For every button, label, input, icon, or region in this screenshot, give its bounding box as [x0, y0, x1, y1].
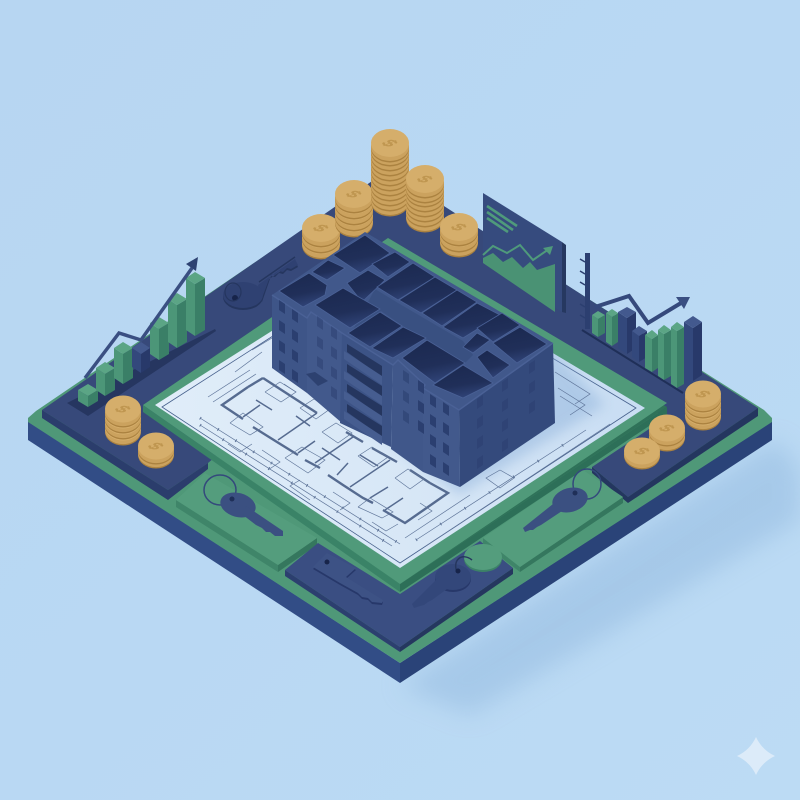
frame top surface: [42, 170, 758, 497]
chart base plate: [67, 329, 216, 416]
right wall: [459, 343, 555, 487]
left bar chart: [67, 257, 216, 416]
coin stack: right tile large: [685, 380, 721, 430]
coin stack: tall: [371, 129, 409, 216]
coin stack: left: [335, 180, 373, 238]
balconies: [344, 344, 382, 445]
blueprint sheet: [155, 330, 645, 568]
panel face: [483, 193, 562, 312]
key shadow: [258, 261, 298, 302]
coin stack: right tile small: $: [628, 445, 656, 457]
interior corridor: [352, 289, 473, 365]
slot line: [259, 257, 295, 282]
right tile side: [592, 408, 758, 503]
top left key: [223, 257, 298, 310]
base board: [28, 172, 772, 683]
paper: [155, 256, 645, 568]
coin stack: far left: [302, 214, 340, 260]
board drop shadow: [400, 440, 800, 715]
coin stack: left tile large: [105, 396, 141, 446]
round key with green tag on navy tile: [412, 544, 502, 608]
coin stacks behind the building: [302, 129, 478, 260]
panel trend line: [483, 245, 549, 260]
chart base line: [582, 330, 683, 393]
coin stack: right tile large: $: [689, 388, 717, 400]
coin stack: far right: [440, 213, 478, 258]
key on right green tile: [523, 469, 601, 532]
inner paper border: [162, 261, 636, 563]
bottom green tile right: [483, 470, 623, 572]
coin stack: right: $: [411, 173, 439, 185]
square key on navy tile: [313, 553, 383, 605]
coin stack: left: $: [340, 188, 368, 200]
parapet edge: [272, 295, 553, 410]
balcony wing wall: [340, 333, 393, 447]
left tile side: [42, 410, 208, 500]
panel text lines: [487, 206, 517, 232]
base side: right: [400, 421, 772, 683]
floor plan thin lines and dimension lines: [200, 338, 610, 546]
green inner ring: [143, 238, 667, 592]
base top: green layer: [28, 172, 772, 663]
left wall windows: [279, 300, 298, 383]
wall chart panel: [483, 193, 566, 313]
coin stack: right tile medium: [649, 414, 685, 452]
coin stack: left tile small: [138, 432, 174, 468]
vertical axis with ticks: [580, 253, 590, 329]
bars: [78, 390, 88, 407]
coin stack: right tile small: [624, 438, 660, 470]
navy frame with left and right tiles: [42, 170, 758, 503]
key body: [258, 259, 298, 298]
shadow of building on paper: [388, 354, 604, 496]
coin stack: far right: $: [445, 221, 473, 233]
roof rooms: [279, 235, 547, 398]
key on left green tile: [204, 475, 283, 536]
bottom green tile left: [176, 473, 317, 572]
key hole and ring: [232, 295, 238, 301]
right wall windows: [477, 360, 535, 469]
entrance wall windows: [317, 316, 337, 400]
coin stack: left tile small: $: [142, 440, 170, 452]
trend arrow: [595, 296, 681, 323]
recessed entrance wall: [307, 312, 342, 423]
growth arrow: [85, 268, 192, 378]
right bar chart: [580, 253, 702, 393]
apartment building: [272, 232, 555, 487]
bottom navy L tile: [285, 541, 513, 652]
bars: [592, 315, 598, 337]
coin stack: far left: $: [307, 222, 335, 234]
coin stack: tall: $: [376, 137, 404, 149]
sparkle watermark: [737, 737, 775, 775]
central and corner windows: [403, 370, 449, 476]
coin stack: right tile medium: $: [653, 422, 681, 434]
central wall: [391, 360, 425, 472]
left wing wall: [272, 295, 307, 393]
coin stack: right: [406, 165, 444, 232]
coin stack: left tile large: $: [109, 403, 137, 415]
panel thickness: [562, 242, 566, 313]
floor plan walls: [222, 378, 448, 523]
roof surface: [272, 232, 553, 410]
entrance canopy: [306, 372, 328, 386]
panel area chart: [483, 253, 555, 312]
corner wall: [423, 388, 460, 487]
base side: left: [28, 421, 400, 683]
